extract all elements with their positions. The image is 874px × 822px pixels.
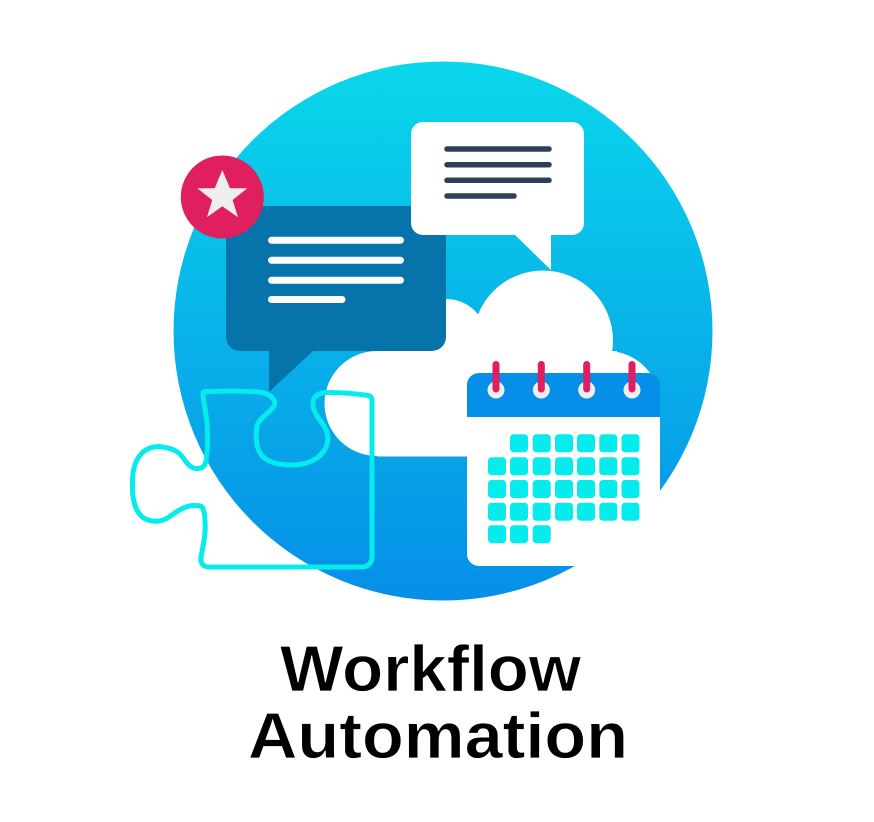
icon: cloud: [324, 270, 660, 457]
panel: white speech bubble: [411, 122, 584, 270]
icon: star badge: [181, 156, 264, 238]
calendar rings: [488, 364, 640, 398]
text lines: white bubble: [447, 149, 549, 196]
text lines: dark bubble: [272, 240, 400, 300]
calendar header: [467, 373, 660, 417]
title: [248, 632, 628, 772]
title: Workflow: [280, 632, 581, 705]
panel: dark speech bubble: [226, 206, 446, 392]
calendar day cells: [488, 434, 640, 543]
title: Automation: [248, 699, 628, 772]
background circle: [174, 62, 712, 600]
icon: calendar: [467, 364, 660, 566]
icon: puzzle piece outline: [132, 391, 372, 567]
